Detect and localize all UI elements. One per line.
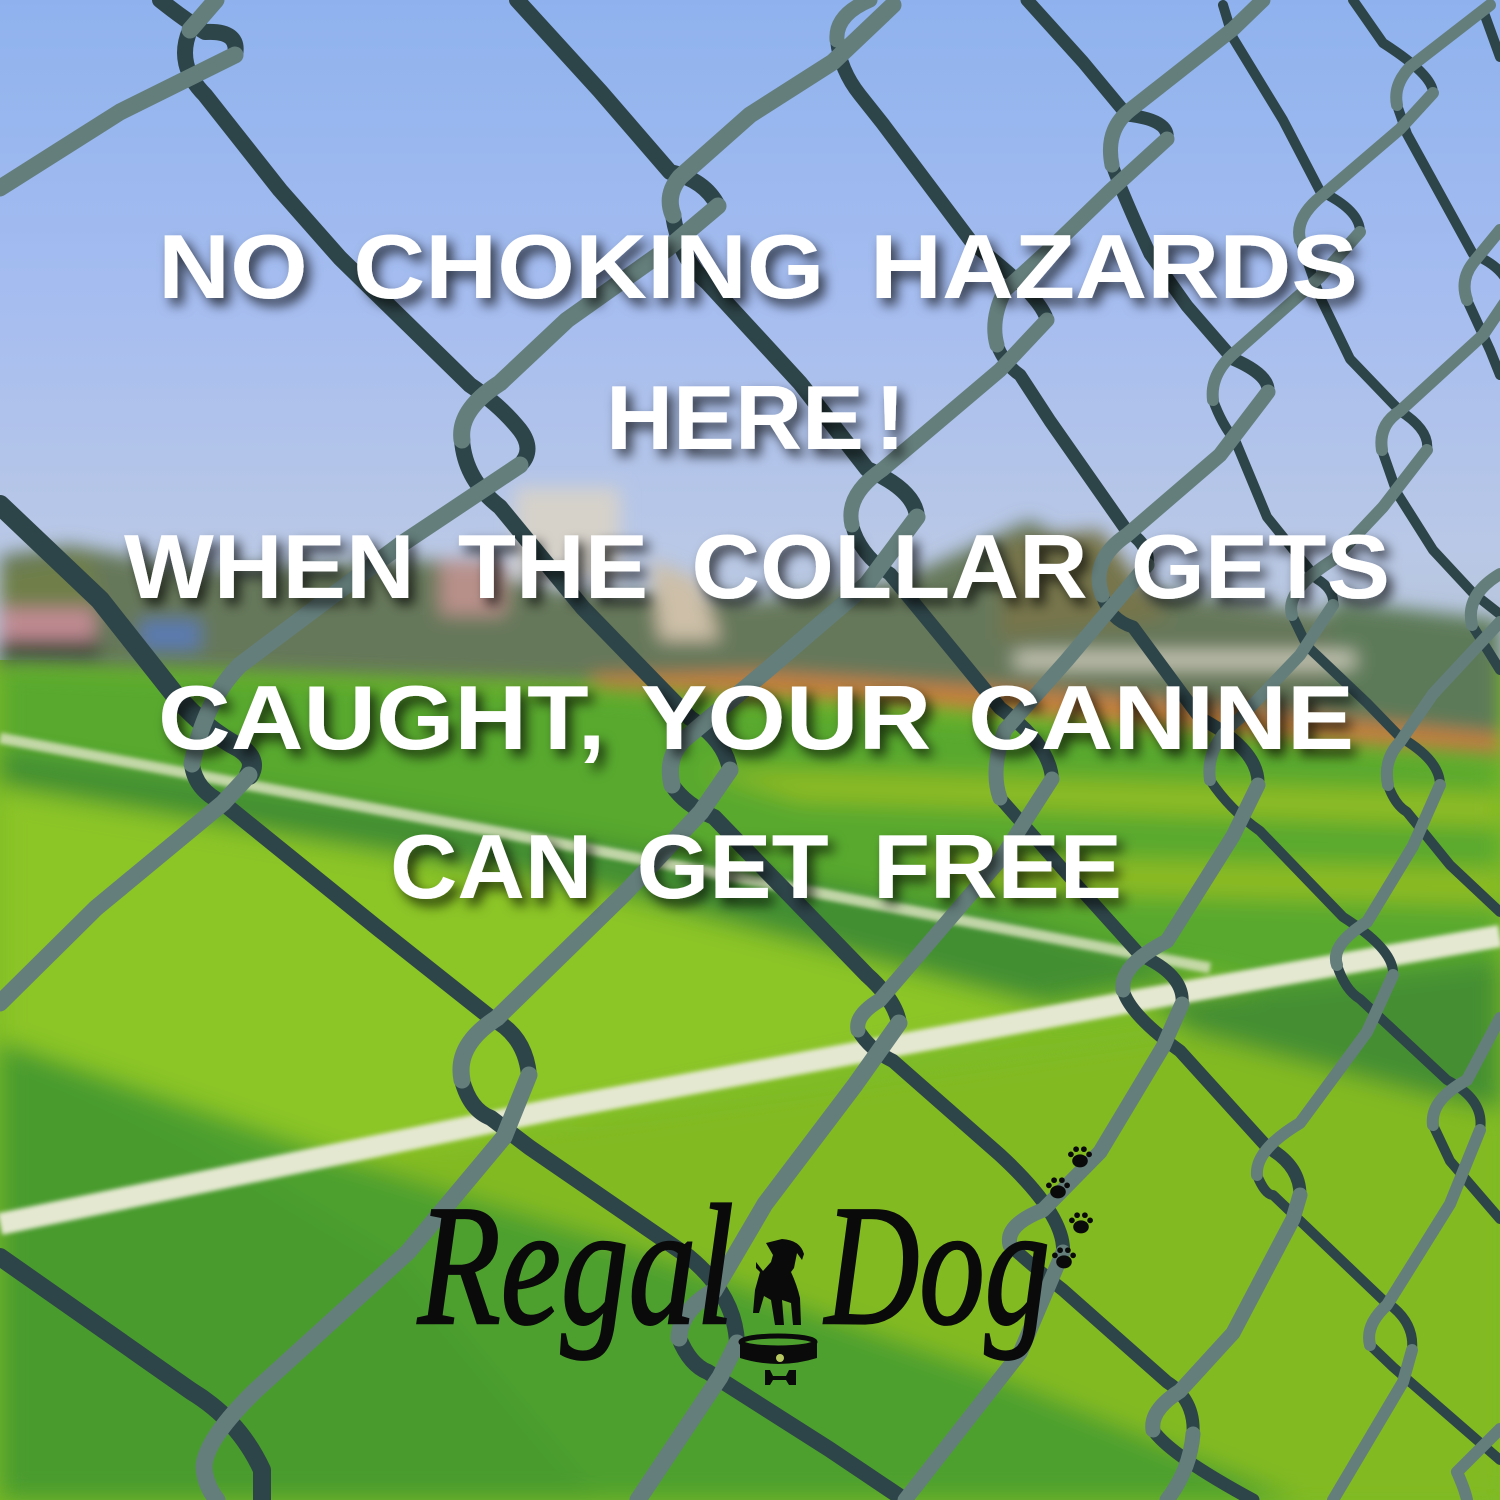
icon: paw prints: [1046, 1146, 1093, 1268]
headline: CAUGHT, YOUR CANINE: [158, 668, 1354, 769]
headline: NO CHOKING HAZARDS: [158, 217, 1358, 318]
logo wordmark: [417, 1171, 1050, 1361]
logo wordmark: Dog: [823, 1171, 1050, 1361]
logo: Regal Dog: [417, 1146, 1093, 1385]
icon: dog silhouette: [753, 1239, 804, 1325]
icon: collar with bone: [740, 1336, 817, 1385]
headline: CAN GET FREE: [390, 817, 1122, 918]
headline: WHEN THE COLLAR GETS: [124, 517, 1390, 618]
headline: !: [875, 368, 905, 469]
white pitch lines: [0, 738, 1500, 1224]
distant trees and buildings: [0, 488, 1500, 760]
headline: [124, 217, 1390, 918]
headline: HERE: [606, 368, 864, 469]
logo wordmark: Regal: [417, 1171, 734, 1361]
grass bands: [0, 665, 1500, 1500]
